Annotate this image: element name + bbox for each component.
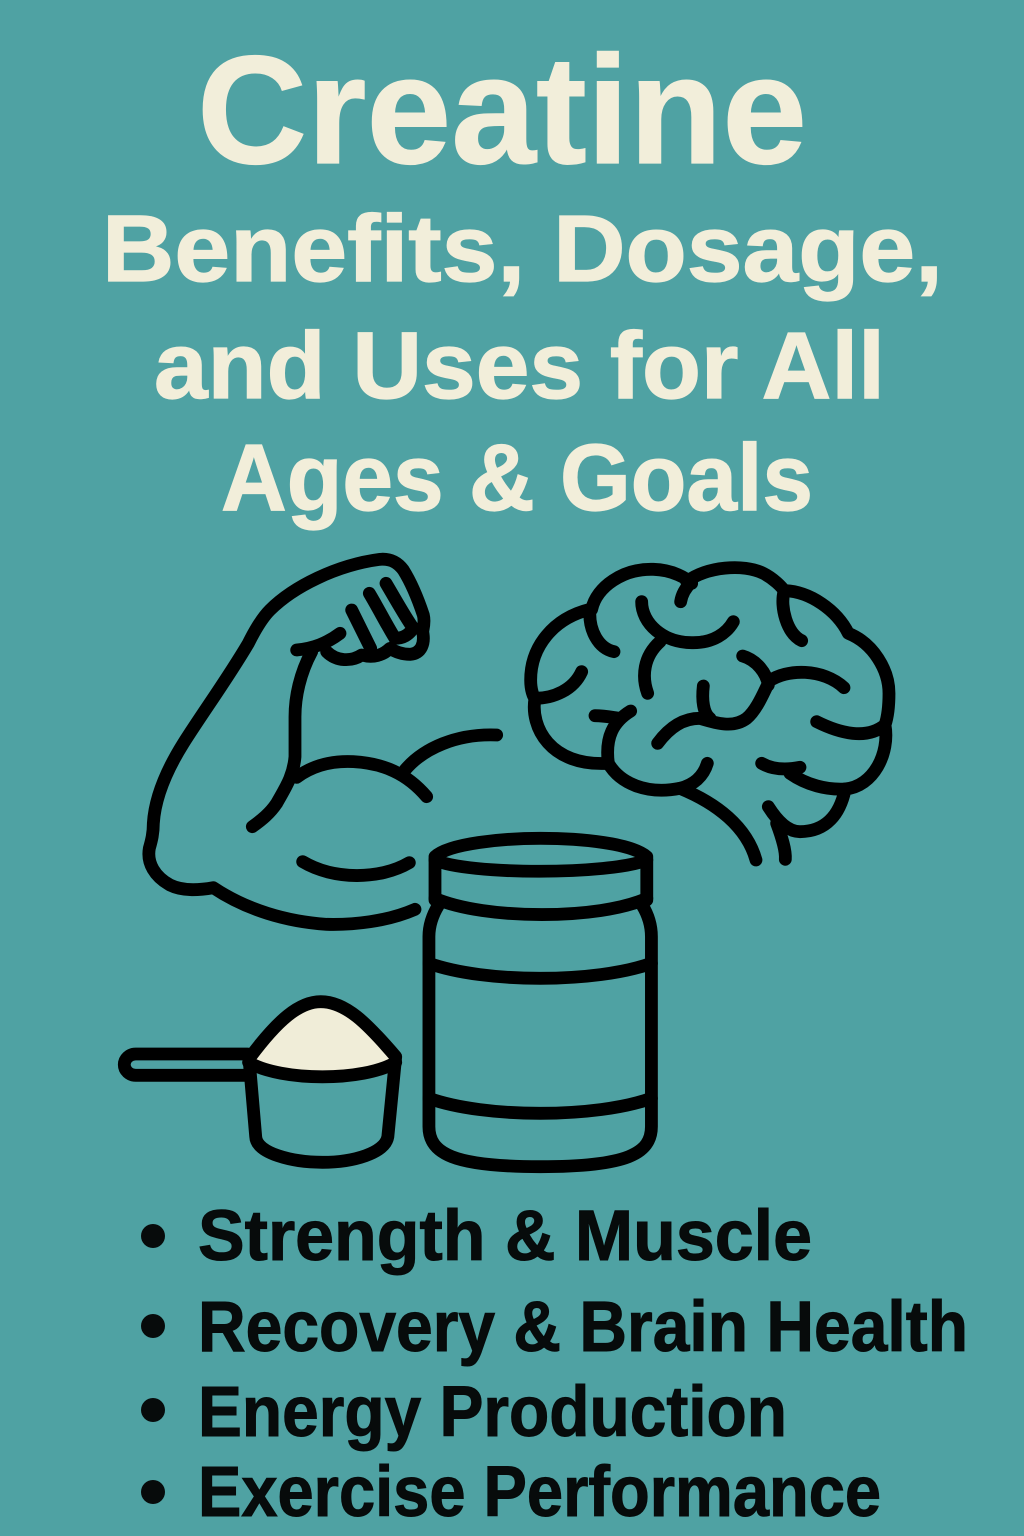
bullet 2: Recovery & Brain Health [198,1288,968,1367]
title block [102,24,943,531]
subtitle line 2: and Uses for All [154,313,885,419]
bullet 1: Strength & Muscle [198,1197,812,1276]
icon: supplement jar [429,838,651,1167]
bullet 4: Exercise Performance [198,1453,881,1532]
powder [250,1002,396,1076]
subtitle line 1: Benefits, Dosage, [102,196,943,302]
scoop handle [124,1054,247,1075]
scoop rim [249,1062,396,1077]
icon: scoop with powder [124,1002,396,1162]
icon: brain [531,568,889,860]
subtitle line 3: Ages & Goals [221,425,813,531]
bullet 3: Energy Production [198,1373,787,1452]
scoop outline [249,1002,396,1162]
icon: flexed arm [149,559,497,924]
benefits list [141,1197,968,1532]
title: Creatine: Creatine [197,24,807,196]
